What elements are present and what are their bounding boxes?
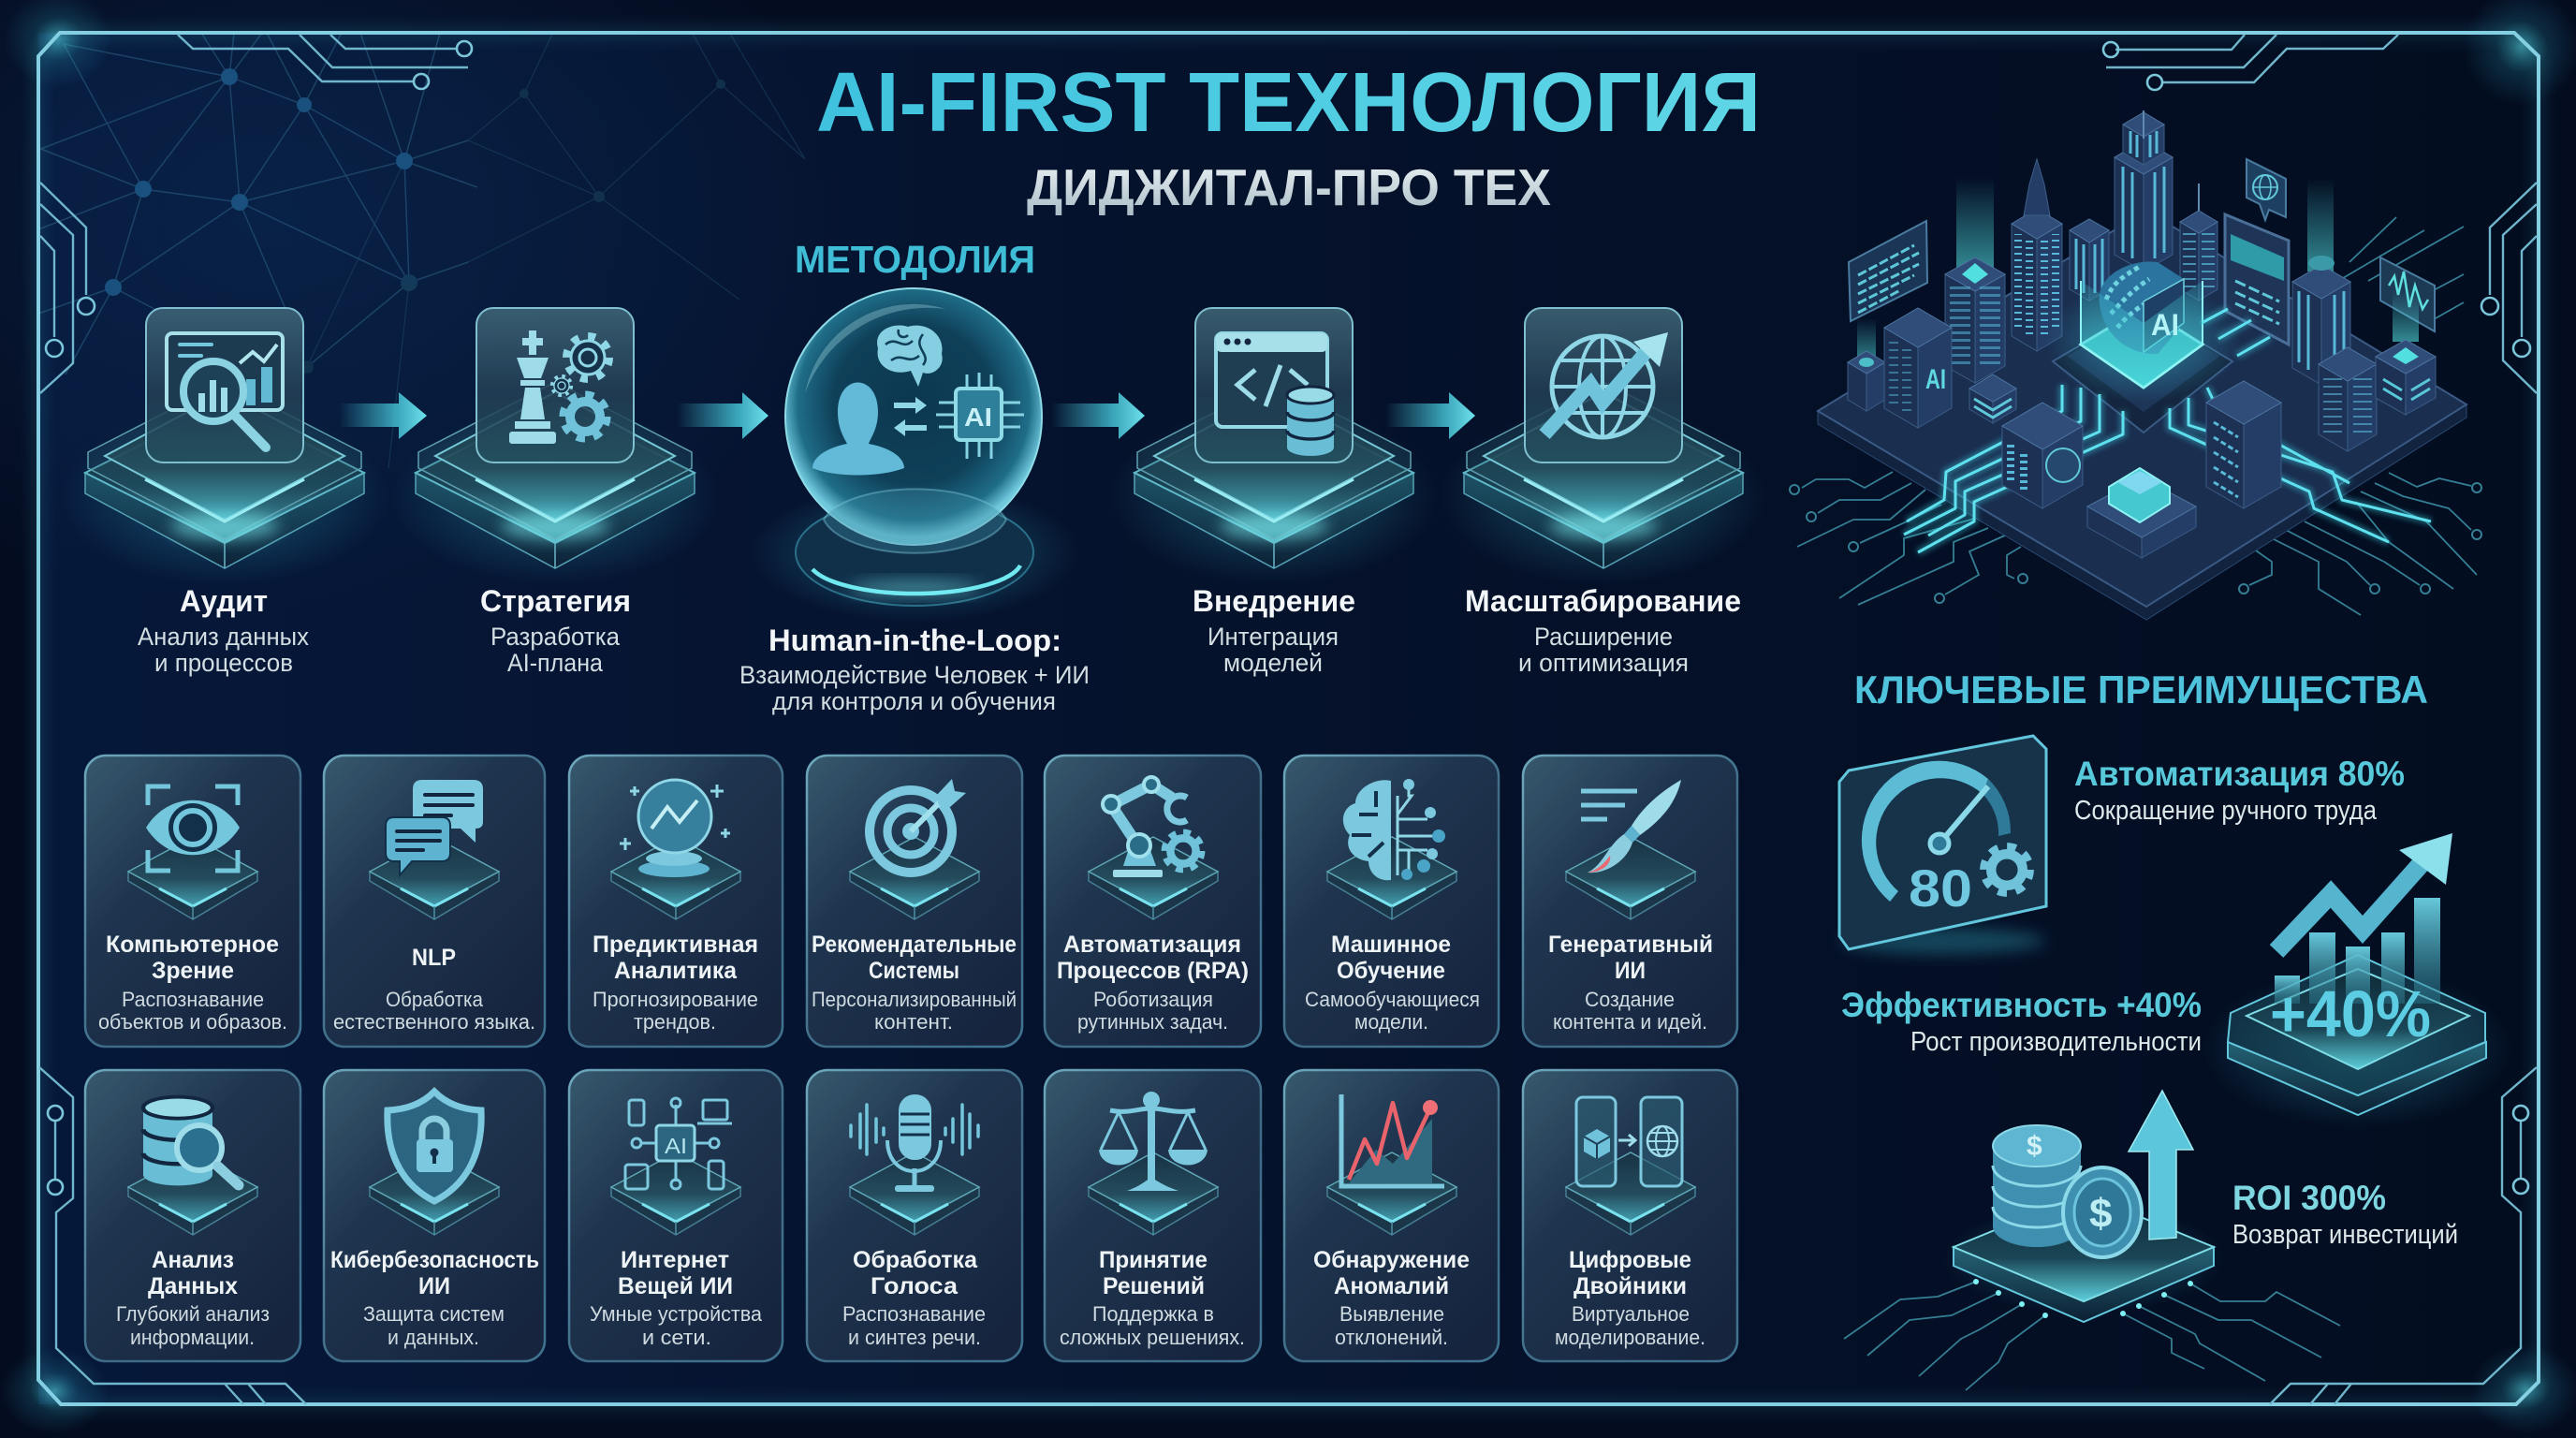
text: Зрение: [152, 958, 234, 984]
sphere base: [751, 482, 1078, 623]
text: объектов и образов.: [98, 1010, 287, 1034]
text: Выявление: [1339, 1302, 1444, 1326]
text: Двойники: [1573, 1273, 1687, 1299]
icon: shield with lock: [388, 1092, 481, 1201]
label: Масштабирование: [1465, 584, 1741, 618]
text: естественного языка.: [333, 1010, 535, 1034]
platform: [850, 837, 979, 919]
card: data analysis: [85, 1070, 300, 1361]
text: Прогнозирование: [593, 988, 758, 1011]
label: Human-in-the-Loop:: [768, 624, 1061, 657]
rear buildings: AI: [1925, 364, 1946, 395]
text: Решений: [1103, 1273, 1205, 1299]
text: Поддержка в: [1092, 1302, 1214, 1326]
platform: [370, 837, 499, 919]
text: Анализ: [152, 1247, 234, 1273]
text: Предиктивная: [593, 932, 758, 958]
label: Разработка: [490, 623, 621, 651]
outer circuit traces: [1790, 217, 2481, 615]
floating screens: [1849, 159, 2435, 345]
text: моделирование.: [1555, 1326, 1705, 1349]
text: отклонений.: [1335, 1326, 1448, 1349]
icon: scales: [1099, 1092, 1208, 1191]
icon: brush: [1581, 780, 1681, 873]
text: Автоматизация: [1063, 932, 1241, 958]
text: [1548, 932, 1713, 1034]
icon: microphone with waves: [851, 1094, 978, 1192]
icon: coin stack: [1993, 1125, 2142, 1257]
card: internet of things: [569, 1070, 783, 1361]
icon: eye: [146, 786, 240, 871]
text: контент.: [874, 1010, 953, 1034]
right buildings: [2319, 347, 2377, 451]
text: Данных: [148, 1273, 238, 1299]
platform: [611, 1152, 740, 1235]
label: [739, 624, 1090, 715]
icon: brain: [877, 326, 943, 387]
platform: [1327, 837, 1456, 919]
label: Взаимодействие Человек + ИИ: [739, 661, 1090, 689]
card: RPA: [1045, 756, 1261, 1047]
step 4: implementation: [1110, 308, 1475, 677]
text: [590, 1247, 763, 1349]
text: [2232, 1179, 2458, 1250]
label: Интеграция: [1208, 623, 1339, 651]
methodology heading: МЕТОДОЛИЯ: [795, 238, 1035, 281]
step 3: human-in-the-loop sphere: [739, 288, 1145, 715]
text: Обнаружение: [1313, 1247, 1470, 1273]
icon: AI chip and devices: [625, 1098, 732, 1189]
platform: [1440, 382, 1767, 585]
platform: [1110, 382, 1438, 585]
circuit lines under platform: [1844, 1282, 2340, 1390]
icon: gauge glass card: [1839, 736, 2046, 954]
text: Компьютерное: [106, 932, 279, 958]
glass card: [1195, 308, 1353, 462]
text: [1841, 986, 2202, 1057]
inner reflection: [824, 489, 1006, 553]
text: Рост производительности: [1910, 1027, 2202, 1057]
text: [2074, 755, 2405, 826]
text: Распознавание: [842, 1302, 986, 1326]
text: Роботизация: [1093, 988, 1213, 1011]
glass card: [146, 308, 303, 462]
text: [1057, 932, 1249, 1034]
text: Виртуальное: [1572, 1302, 1690, 1326]
text: ROI 300%: [2232, 1179, 2386, 1217]
text: информации.: [130, 1326, 255, 1349]
section heading: key benefits: КЛЮЧЕВЫЕ ПРЕИМУЩЕСТВА: [1854, 668, 2428, 712]
text: рутинных задач.: [1077, 1010, 1228, 1034]
text: [812, 932, 1017, 1034]
label: [1193, 584, 1355, 677]
platform: [1566, 1152, 1695, 1235]
text: и синтез речи.: [848, 1326, 981, 1349]
text: [1555, 1247, 1705, 1349]
text: Глубокий анализ: [116, 1302, 270, 1326]
text: Обработка: [386, 988, 484, 1011]
card: digital twins: [1523, 1070, 1737, 1361]
text: Генеративный: [1548, 932, 1713, 958]
sphere highlight: [805, 304, 945, 393]
icon: AI chip and devices: AI: [665, 1134, 687, 1158]
icon: anomaly chart: [1341, 1094, 1444, 1186]
card: NLP: [324, 756, 545, 1047]
label: Внедрение: [1193, 584, 1355, 618]
text: Возврат инвестиций: [2232, 1220, 2458, 1250]
text: и сети.: [642, 1326, 711, 1349]
platform: [391, 382, 719, 585]
platform: [850, 1152, 979, 1235]
arrow: [677, 392, 768, 439]
icon: crystal ball: [620, 780, 730, 877]
icon: coin stack: $: [2027, 1131, 2042, 1162]
label: моделей: [1223, 649, 1323, 677]
arrow: [1051, 392, 1145, 439]
text: Создание: [1585, 988, 1675, 1011]
text: Защита систем: [363, 1302, 505, 1326]
text: Распознавание: [122, 988, 264, 1011]
icon: database with magnifier: [143, 1097, 239, 1185]
isometric AI city: [1790, 110, 2512, 1390]
icon: person: [812, 382, 904, 476]
step 5: scaling: [1440, 308, 1767, 677]
network background: [38, 33, 805, 468]
glass card: [476, 308, 634, 462]
text: Вещей ИИ: [618, 1273, 733, 1299]
text: Аномалий: [1334, 1273, 1449, 1299]
label: Анализ данных: [138, 623, 309, 651]
text: модели.: [1354, 1010, 1428, 1034]
text: сложных решениях.: [1060, 1326, 1245, 1349]
icon: growth chart platform: [2203, 833, 2512, 1128]
platform: [61, 382, 388, 585]
benefit: automation 80%: [1839, 736, 2405, 954]
platform: [1566, 837, 1695, 919]
card: decision making: [1045, 1070, 1261, 1361]
platform: [370, 1152, 499, 1235]
text: [330, 1247, 539, 1349]
icon: brain and circuits: [1343, 779, 1445, 880]
text: Интернет: [621, 1247, 729, 1273]
card: voice processing: [807, 1070, 1022, 1361]
icon: growth chart platform: +40%: [2270, 977, 2431, 1050]
icon: AI chip: [936, 373, 1024, 459]
central AI chip: [2045, 261, 2242, 433]
text: ИИ: [1615, 958, 1646, 984]
icon: coin stack: $: [2089, 1191, 2112, 1237]
text: Принятие: [1099, 1247, 1208, 1273]
text: [593, 932, 758, 1034]
step 1: audit: [61, 308, 427, 677]
text: [1060, 1247, 1245, 1349]
text: Цифровые: [1569, 1247, 1691, 1273]
icon: globe with growth arrow: [1544, 332, 1668, 437]
card: recommender systems: [807, 756, 1022, 1047]
text: Автоматизация 80%: [2074, 755, 2405, 793]
icon: report with magnifier: [167, 333, 283, 448]
text: Сокращение ручного труда: [2074, 796, 2378, 826]
base plate: [1818, 211, 2466, 620]
icon: code window with database: [1216, 333, 1334, 456]
icon: growth arrow: [2129, 1091, 2193, 1240]
card: generative AI: [1523, 756, 1737, 1047]
card: machine learning: [1284, 756, 1499, 1047]
label: AI-плана: [507, 649, 604, 677]
platform: [611, 837, 740, 919]
text: Процессов (RPA): [1057, 958, 1249, 984]
platform: [1089, 1152, 1218, 1235]
step 2: strategy: [391, 308, 768, 677]
text: Эффективность +40%: [1841, 986, 2202, 1024]
text: Рекомендательные: [812, 932, 1017, 958]
icon: exchange arrows: [894, 397, 927, 436]
text: ИИ: [418, 1273, 450, 1299]
text: [1305, 932, 1480, 1034]
subtitle: ДИДЖИТАЛ-ПРО ТЕХ: [1027, 158, 1551, 216]
arrow: [339, 392, 427, 439]
text: и данных.: [388, 1326, 479, 1349]
text: [1313, 1247, 1470, 1349]
text: Персонализированный: [812, 988, 1017, 1011]
light beams: [1956, 178, 1994, 271]
card: predictive analytics: [569, 756, 783, 1047]
card: computer vision: [85, 756, 300, 1047]
benefit: efficiency +40%: [1841, 833, 2512, 1128]
text: [333, 945, 535, 1034]
benefit: ROI 300%: [1844, 1091, 2458, 1390]
text: NLP: [412, 945, 456, 971]
left buildings: [1857, 318, 1876, 365]
text: Умные устройства: [590, 1302, 763, 1326]
text: Голоса: [871, 1273, 959, 1299]
front buildings: [2002, 403, 2083, 508]
glass sphere: [785, 288, 1042, 545]
label: и процессов: [154, 649, 293, 677]
icon: target with arrow: [870, 779, 966, 873]
label: для контроля и обучения: [772, 687, 1056, 715]
text: [842, 1247, 986, 1349]
platform: [128, 837, 257, 919]
card: anomaly detection: [1284, 1070, 1499, 1361]
text: Аналитика: [614, 958, 738, 984]
icon: chess king and gears: [509, 330, 609, 444]
label: и оптимизация: [1518, 649, 1689, 677]
label: [138, 584, 309, 677]
platform: [1089, 837, 1218, 919]
arrow: [1385, 392, 1475, 439]
label: Расширение: [1534, 623, 1673, 651]
label: Стратегия: [480, 584, 631, 618]
text: Кибербезопасность: [330, 1247, 539, 1273]
title: AI-FIRST ТЕХНОЛОГИЯ: [816, 56, 1761, 150]
text: [116, 1247, 270, 1349]
icon: AI chip: AI: [964, 403, 992, 432]
glowing traces: [1904, 309, 2431, 552]
glass card: [1525, 308, 1682, 462]
icon: gauge glass card: 80: [1909, 858, 1972, 917]
text: Самообучающиеся: [1305, 988, 1480, 1011]
text: Обработка: [853, 1247, 978, 1273]
platform: [128, 1152, 257, 1235]
icon: chat bubbles: [386, 780, 483, 875]
label: [1465, 584, 1741, 677]
card: cybersecurity: [324, 1070, 545, 1361]
text: [98, 932, 287, 1034]
platform: [1327, 1152, 1456, 1235]
text: контента и идей.: [1553, 1010, 1707, 1034]
label: Аудит: [180, 584, 268, 618]
text: Машинное: [1331, 932, 1451, 958]
icon: platform: [1943, 1194, 2224, 1322]
text: Обучение: [1337, 958, 1445, 984]
icon: twin phones: [1576, 1097, 1682, 1186]
central AI chip: AI: [2151, 308, 2179, 342]
text: Системы: [869, 958, 959, 984]
text: трендов.: [634, 1010, 716, 1034]
rear buildings: [1848, 110, 2436, 558]
label: [480, 584, 631, 677]
icon: robot arm and gear: [1103, 777, 1202, 877]
